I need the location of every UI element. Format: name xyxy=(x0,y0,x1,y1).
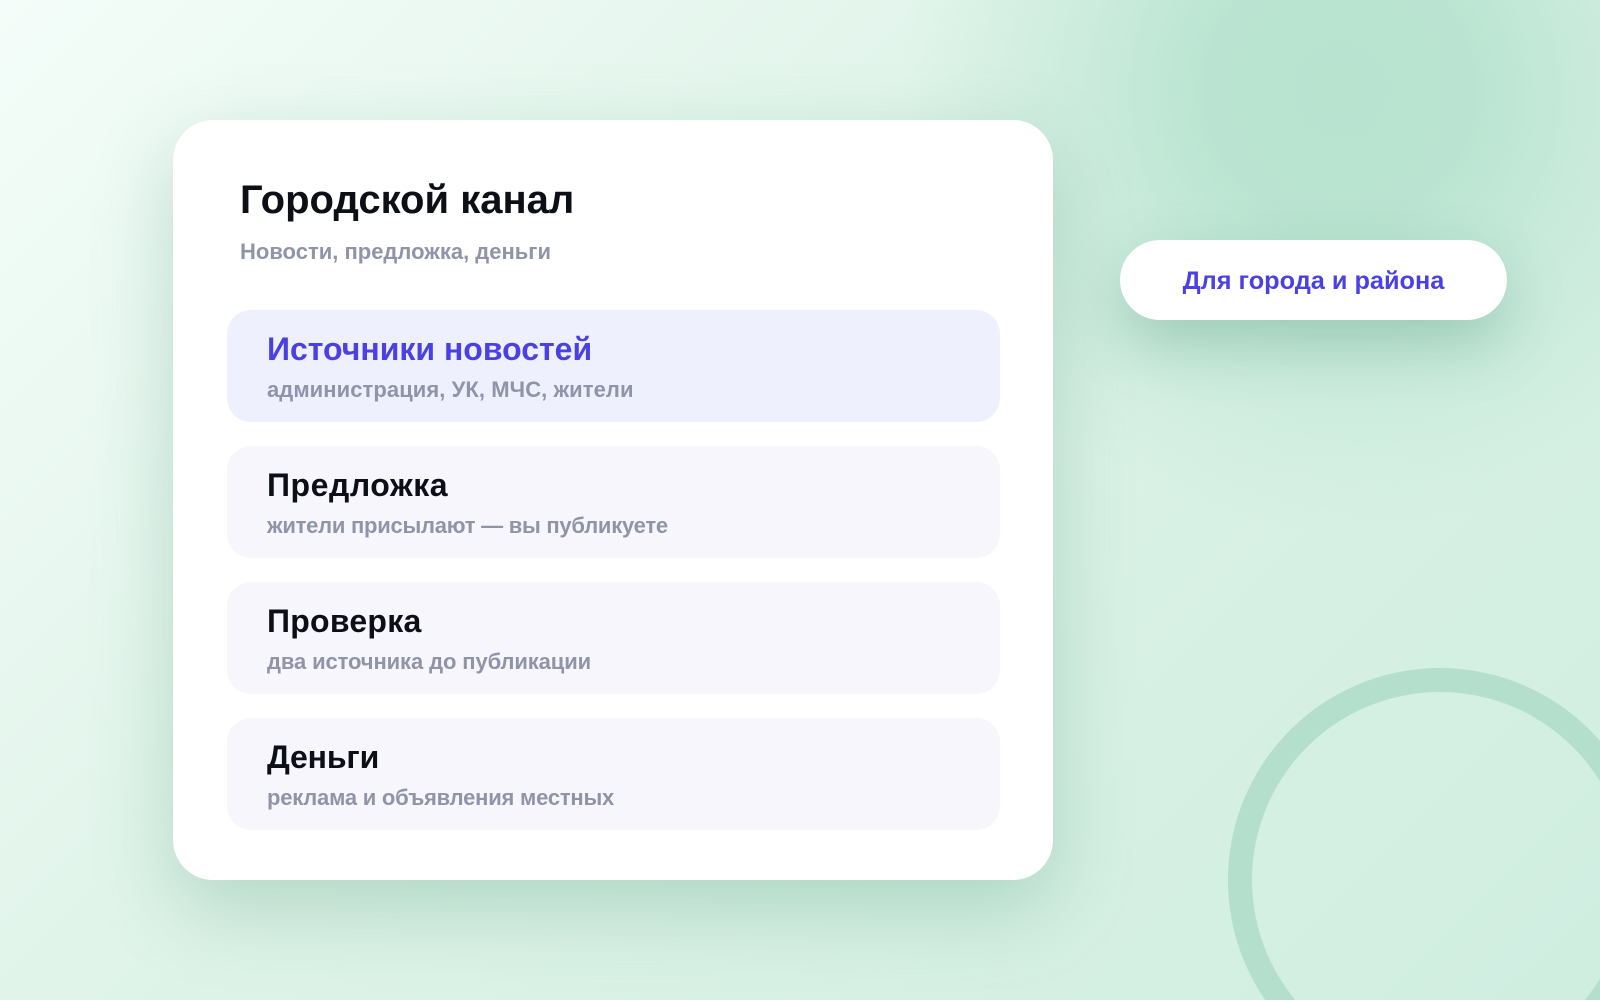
row: submissions xyxy=(227,446,1000,558)
row: money: реклама и объявления местных xyxy=(267,784,614,810)
row: news sources xyxy=(227,310,1000,422)
decorative ring xyxy=(1228,668,1600,1000)
badge: audience pill xyxy=(1120,240,1507,320)
row: verification xyxy=(227,582,1000,694)
row: verification: Проверка xyxy=(267,602,422,638)
row: news sources: администрация, УК, МЧС, жители xyxy=(267,376,634,402)
row: money: Деньги xyxy=(267,738,379,774)
title: Городской канал xyxy=(240,178,574,222)
row: money xyxy=(227,718,1000,830)
badge: audience pill: Для города и района xyxy=(1183,267,1444,295)
subtitle: Новости, предложка, деньги xyxy=(240,239,551,264)
panel: main card xyxy=(173,120,1053,880)
row: news sources: Источники новостей xyxy=(267,330,592,366)
row: submissions: жители присылают — вы публикуете xyxy=(267,512,668,538)
row: submissions: Предложка xyxy=(267,466,448,502)
row: verification: два источника до публикации xyxy=(267,648,591,674)
